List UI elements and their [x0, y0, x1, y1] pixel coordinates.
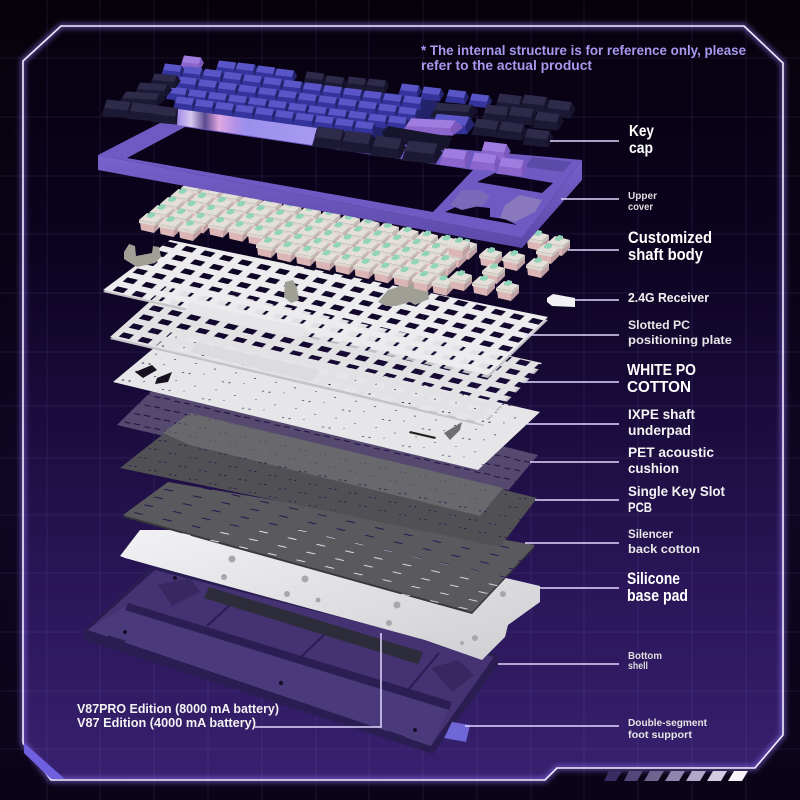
label: white PO cotton [627, 362, 696, 396]
label: battery editions [77, 702, 279, 730]
label: battery editions: V87 Edition (4000 mA battery) [77, 716, 256, 730]
left modifier keys [101, 74, 182, 124]
note text [421, 43, 746, 73]
label: upper cover: Upper [628, 191, 657, 202]
label: foot support [628, 717, 707, 741]
right shift key [401, 118, 463, 136]
label: key cap: Key [629, 123, 654, 140]
label: IXPE shaft underpad: IXPE shaft [628, 406, 695, 422]
upper cover [98, 123, 582, 248]
bottom shell [84, 565, 498, 754]
silicone base pad [120, 530, 540, 660]
foot support [444, 722, 470, 742]
label: white PO cotton: COTTON [627, 379, 691, 396]
label: PET acoustic cushion: PET acoustic [628, 444, 714, 460]
plate space bar area [190, 342, 320, 382]
IXPE underpad [117, 372, 538, 504]
label: customized shaft body: shaft body [628, 246, 704, 264]
arrow keys [439, 142, 528, 176]
label: IXPE shaft underpad: underpad [628, 422, 691, 438]
label: key cap: cap [629, 140, 653, 157]
label: battery editions: V87PRO Edition (8000 mA battery) [77, 702, 279, 716]
label: foot support: foot support [628, 729, 693, 741]
label: silicone base pad: Silicone [627, 569, 680, 588]
label: IXPE shaft underpad [628, 406, 695, 438]
label: upper cover: cover [628, 202, 653, 213]
label: single key slot PCB: Single Key Slot [628, 483, 725, 499]
keycap base [163, 66, 472, 138]
label: customized shaft body [628, 229, 712, 264]
stabilizers [124, 244, 429, 306]
top plate [103, 240, 548, 378]
label: single key slot PCB: PCB [628, 499, 652, 515]
label: silencer back cotton: Silencer [628, 527, 673, 541]
leader lines [255, 141, 619, 727]
top plate space bar area [184, 303, 307, 338]
long dark key [382, 126, 452, 151]
label: customized shaft body: Customized [628, 229, 712, 247]
frame corner accent [24, 743, 65, 779]
label: slotted PC plate: positioning plate [628, 333, 732, 347]
label: upper cover [628, 191, 657, 213]
white PO cotton [113, 328, 540, 470]
keycaps [101, 56, 576, 176]
label: bottom shell [628, 651, 662, 672]
note text: refer to the actual product [421, 58, 593, 73]
switches [139, 180, 570, 301]
alpha rows [161, 64, 478, 135]
label: silicone base pad: base pad [627, 586, 688, 605]
label: slotted PC plate [628, 318, 732, 347]
label: silencer back cotton: back cotton [628, 542, 700, 556]
label: bottom shell: shell [628, 661, 648, 672]
label: slotted PC plate: Slotted PC [628, 318, 690, 332]
space bar [177, 109, 317, 145]
label: receiver: 2.4G Receiver [628, 290, 709, 305]
label: PET acoustic cushion: cushion [628, 460, 679, 476]
2.4G receiver [547, 294, 575, 307]
PCB [123, 482, 535, 614]
label: bottom shell: Bottom [628, 651, 662, 662]
label: foot support: Double-segment [628, 717, 707, 729]
label: key cap [629, 123, 654, 157]
label: PET acoustic cushion [628, 444, 714, 476]
function row [180, 56, 492, 108]
black bottom row [312, 127, 442, 164]
label: white PO cotton: WHITE PO [627, 362, 696, 379]
note text: * The internal structure is for reference only, please [421, 43, 746, 58]
label: single key slot PCB [628, 483, 725, 515]
label: silencer back cotton [628, 527, 700, 556]
slotted PC positioning plate [110, 282, 542, 426]
PET acoustic cushion [120, 413, 537, 547]
navigation cluster [471, 94, 576, 147]
progress stripes [604, 771, 748, 781]
label: silicone base pad [627, 569, 688, 605]
